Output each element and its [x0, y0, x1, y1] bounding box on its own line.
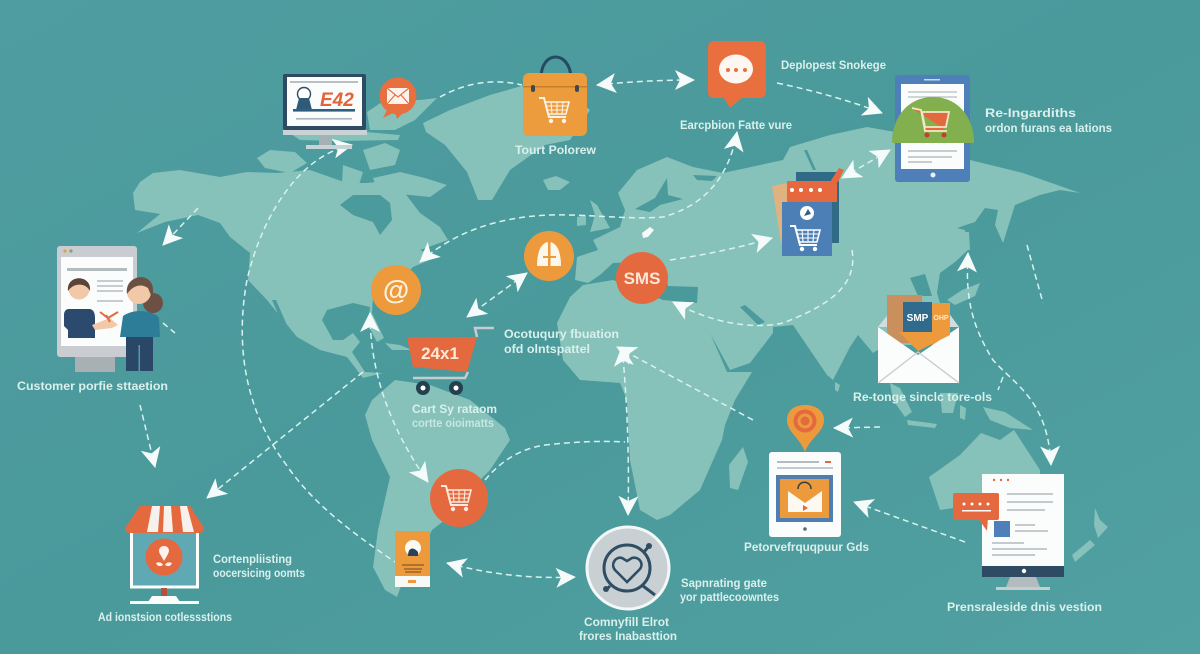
label: Re-tonge sinclc tore-ols: Re-tonge sinclc tore-ols: [853, 390, 992, 404]
Australia: [929, 430, 1040, 525]
label: Deplopest Snokege: Deplopest Snokege: [781, 58, 886, 72]
Greenland: [423, 85, 590, 200]
icon: chat bubble: [708, 41, 766, 108]
Baja channel: [272, 300, 289, 330]
icon: lock circle: [524, 231, 574, 281]
icon: location pin: [787, 405, 824, 452]
Great Britain and Ireland: [577, 200, 610, 232]
label: ofd olntspattel: ofd olntspattel: [504, 342, 590, 356]
Iceland: [543, 176, 570, 190]
inland waters: [272, 150, 932, 330]
icon: shopping bag: [523, 57, 587, 136]
icon: heart magnifier badge: [587, 527, 669, 609]
Persian Gulf: [740, 305, 765, 325]
label: Cart Sy rataom: Cart Sy rataom: [412, 402, 497, 416]
icon: at sign circle: [371, 265, 421, 315]
Canadian arctic islands: [257, 98, 447, 197]
icon: storefront monitor: [125, 506, 204, 604]
label: Comnyfill Elrot: Comnyfill Elrot: [584, 615, 669, 629]
icon: orange cart circle: [430, 469, 488, 527]
White Sea: [693, 175, 717, 181]
icon: customer monitor with people: [57, 246, 163, 372]
Madagascar: [729, 447, 748, 490]
Kara inlet: [804, 150, 816, 170]
world map: [133, 85, 1108, 597]
label: Tour Polorew: Tourt Polorew: [515, 143, 597, 157]
label: Ad ionstsion cotlessstions: Ad ionstsion cotlessstions: [98, 610, 232, 624]
icon: cart with 24x1: 24x1: [421, 344, 459, 363]
icon: envelope with cards: SMP: [907, 313, 929, 324]
label: Customer porfie sttaetion: Customer porfie sttaetion: [17, 379, 168, 393]
Yellow Sea: [910, 274, 932, 296]
Sri Lanka: [835, 382, 840, 392]
label: oocersicing oomts: oocersicing oomts: [213, 566, 305, 580]
icon: SMS circle: SMS: [624, 269, 660, 288]
label: Prensraleside dnis vestion: Prensraleside dnis vestion: [947, 600, 1102, 614]
icon: at sign circle: @: [383, 275, 409, 305]
icon: phone card: [395, 531, 430, 587]
icon: cart with 24x1: [407, 328, 494, 395]
label: Sapnrating gate: Sapnrating gate: [681, 576, 767, 590]
icon: envelope with cards: [878, 295, 959, 383]
icon: tablet with cart: [892, 75, 974, 182]
label: cortte oioimatts: cortte oioimatts: [412, 416, 494, 430]
Africa: [557, 280, 752, 520]
Hudson Bay: [340, 195, 392, 235]
Indonesia: [890, 383, 1033, 430]
icon: tablet with envelope: [769, 452, 841, 537]
connection arrows: [140, 80, 1051, 577]
label: Cortenpliisting: Cortenpliisting: [213, 552, 292, 566]
white island mark: [642, 227, 654, 238]
icon: desktop monitor with chat: [953, 474, 1064, 590]
icon: monitor with profile: [283, 74, 367, 149]
Eurasia: [575, 127, 1080, 380]
icon: monitor with profile: E42: [320, 90, 354, 111]
icon: mail bubble: [380, 78, 416, 119]
label: Earcpbion Fatte vure: Earcpbion Fatte vure: [680, 118, 792, 132]
New Zealand: [1072, 508, 1108, 562]
label: frores Inabasttion: frores Inabasttion: [579, 629, 677, 643]
Japan and Sakhalin: [947, 232, 980, 305]
South America: [365, 380, 510, 597]
label: Re-Ingardiths: Re-Ingardiths: [985, 106, 1076, 120]
icon: folder with cart: [772, 168, 844, 256]
label: Petorvefrquqpuur Gds: Petorvefrquqpuur Gds: [744, 540, 869, 554]
icon: envelope with cards: OHP: [933, 315, 949, 322]
North America: [133, 170, 448, 378]
Baltic Sea: [635, 178, 683, 212]
Cuba: [385, 343, 412, 350]
label: Ocotuqury fbuation: Ocotuqury fbuation: [504, 327, 619, 341]
label: yor pattlecoowntes: yor pattlecoowntes: [680, 590, 779, 604]
label: ordon furans ea lations: ordon furans ea lations: [985, 121, 1112, 135]
icon: SMS circle: [616, 252, 668, 304]
